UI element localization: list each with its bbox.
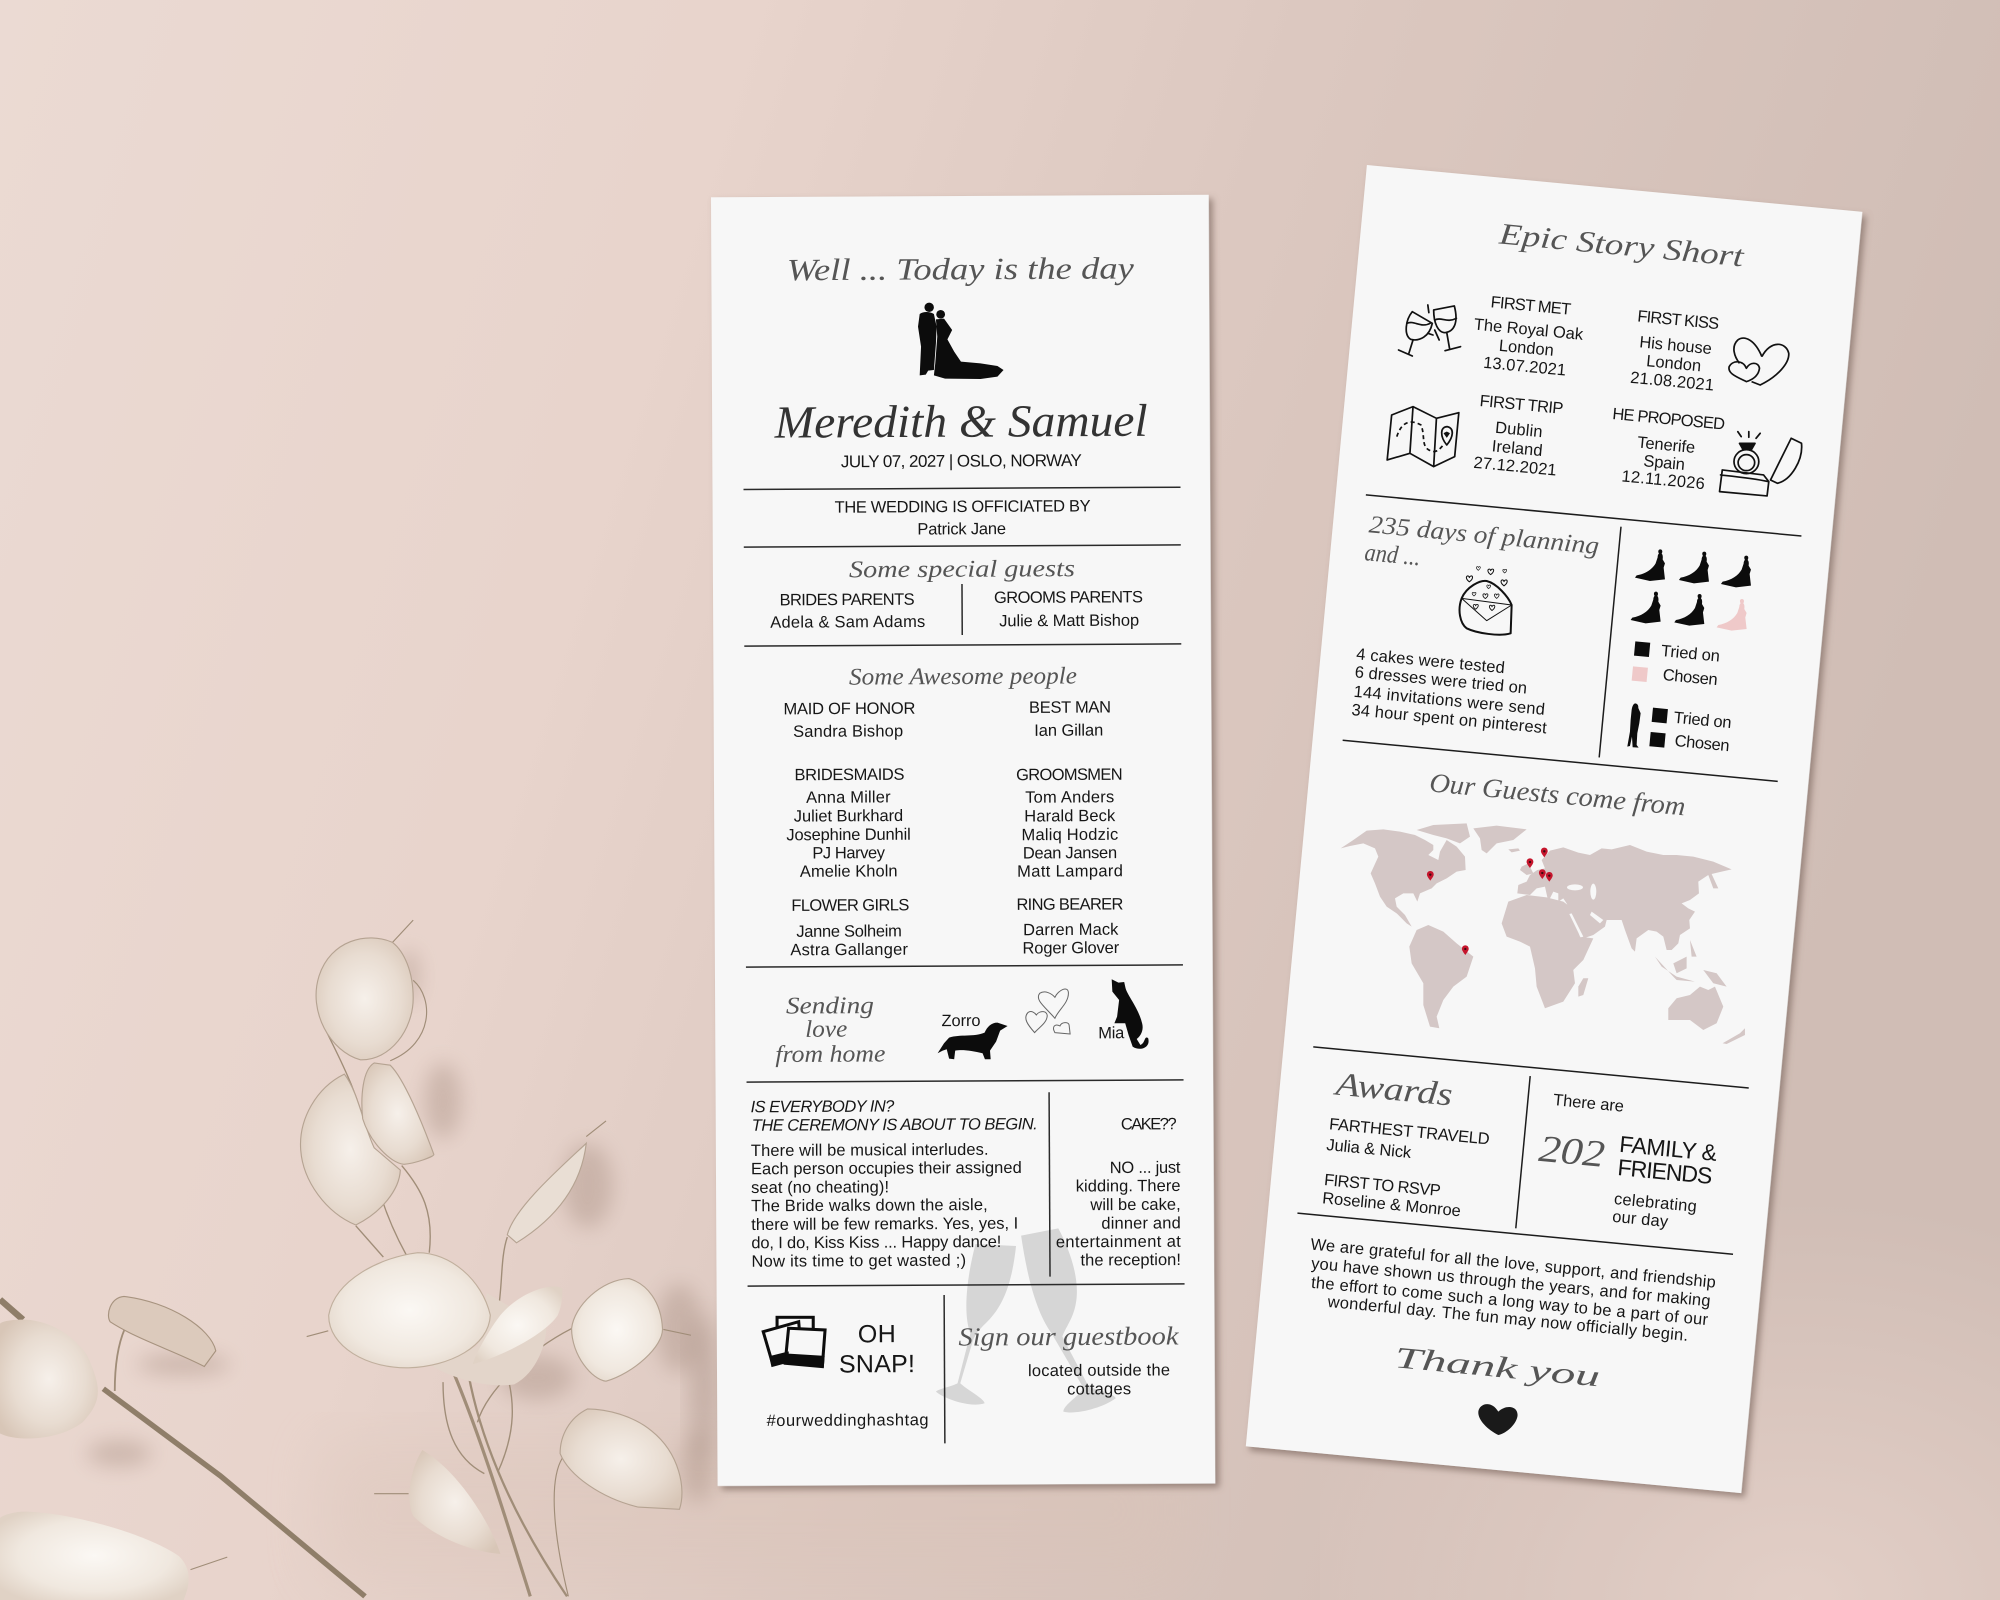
legend square: dress tried on [1634, 641, 1650, 657]
groomsmen: Harald Beck [1024, 807, 1116, 826]
leaf shadows [87, 949, 714, 1503]
heading: some special guests: Some special guests [849, 556, 1075, 583]
guestbook location [1028, 1361, 1170, 1399]
he proposed: Spain [1643, 452, 1686, 474]
cake note: kidding. There [1076, 1177, 1181, 1196]
suit legend labels: Chosen [1674, 732, 1730, 755]
icon: dress silhouettes tally [1627, 549, 1751, 748]
dress 1 tried on [1635, 549, 1665, 581]
cake note [1055, 1115, 1181, 1270]
guest count: celebrating [1613, 1190, 1698, 1216]
he proposed [1606, 405, 1726, 495]
sending love from home [775, 993, 886, 1068]
icon: three outline hearts [1026, 989, 1070, 1034]
inland seas [1567, 884, 1603, 937]
heading: epic story short: Epic Story Short [1497, 217, 1746, 274]
botanical branch with lunaria leaves [0, 920, 714, 1600]
planning stats: 144 invitations were send [1353, 683, 1546, 719]
he proposed: Tenerife [1637, 434, 1696, 457]
guest count: our day [1611, 1208, 1670, 1231]
first met: 13.07.2021 [1482, 354, 1567, 380]
bridesmaids: Josephine Dunhil [786, 826, 911, 844]
leaf: behind [448, 1300, 544, 1386]
ceremony notes [751, 1097, 1038, 1271]
icon: envelope with hearts [1460, 567, 1512, 635]
dress legend labels: Chosen [1662, 666, 1718, 689]
grooms parents: GROOMS PARENTS [994, 588, 1143, 607]
leaf: top [316, 938, 413, 1060]
icon: stacked photos [763, 1317, 825, 1367]
suit legend labels [1671, 709, 1733, 755]
heading: 235 days of planning [1363, 511, 1600, 588]
flower girls: Astra Gallanger [790, 941, 908, 959]
dress legend labels [1658, 642, 1721, 689]
ceremony notes: do, I do, Kiss Kiss ... Happy dance! [751, 1233, 1001, 1252]
brides parents: BRIDES PARENTS [780, 591, 915, 609]
bridesmaids: PJ Harvey [812, 844, 886, 862]
groomsmen: Maliq Hodzic [1021, 826, 1118, 844]
leaf: mid left [301, 1074, 400, 1225]
first trip: FIRST TRIP [1479, 392, 1564, 418]
first kiss: His house [1639, 333, 1713, 358]
thank-you paragraph: the effort to come such a long way to be a part of our [1310, 1274, 1709, 1329]
leaf: left slim [108, 1296, 216, 1366]
awards list: Julia & Nick [1326, 1136, 1413, 1162]
first kiss: London [1646, 352, 1702, 375]
icon: cat silhouette [1112, 979, 1149, 1049]
icon: groom silhouette [1627, 703, 1641, 748]
awards list: FIRST TO RSVP [1323, 1171, 1442, 1200]
first kiss [1630, 307, 1721, 395]
legend square: suit chosen [1649, 732, 1666, 748]
icon: ring in box [1720, 432, 1802, 496]
guest count: 202 [1537, 1128, 1607, 1176]
soft shadow by the card edge [692, 1315, 716, 1455]
panel: story card [1246, 165, 1862, 1493]
background wall [409, 0, 2000, 1600]
sending love from home: Sending [786, 993, 874, 1020]
heading: 235 days of planning: and ... [1363, 539, 1422, 571]
guestbook location: cottages [1067, 1380, 1131, 1398]
heading: awards: Awards [1332, 1066, 1454, 1113]
he proposed: HE PROPOSED [1612, 405, 1726, 434]
maid of honor: Sandra Bishop [793, 722, 903, 741]
brides parents [770, 591, 925, 632]
planning stats: 34 hour spent on pinterest [1351, 701, 1548, 737]
cake note: entertainment at [1056, 1233, 1181, 1251]
pin centres [1429, 850, 1550, 950]
guestbook heading: Sign our guestbook [958, 1321, 1179, 1352]
leaf: large pearl [329, 1253, 490, 1368]
maid of honor: MAID OF HONOR [783, 700, 916, 718]
icon: champagne glasses watermark [936, 1228, 1116, 1412]
heading: our guests come from: Our Guests come from [1428, 767, 1687, 821]
guest count: There are [1552, 1091, 1625, 1116]
dress 4 tried on [1631, 592, 1661, 623]
first trip [1473, 392, 1564, 480]
awards list [1321, 1115, 1490, 1222]
officiant: Patrick Jane [917, 520, 1006, 539]
continents [1341, 823, 1745, 1044]
legend square: dress chosen [1632, 666, 1648, 682]
groomsmen: GROOMSMEN [1016, 766, 1123, 784]
bridesmaids: Juliet Burkhard [794, 807, 903, 826]
maid of honor [783, 700, 916, 741]
best man: BEST MAN [1029, 698, 1111, 717]
bridesmaids: Anna Miller [806, 788, 891, 807]
thank-you paragraph: We are grateful for all the love, support, and friendship [1310, 1236, 1717, 1292]
dress 6 chosen [1717, 599, 1747, 631]
bridesmaids: Amelie Kholn [800, 862, 898, 881]
hashtag: #ourweddinghashtag [767, 1411, 929, 1430]
groomsmen: Matt Lampard [1017, 862, 1123, 881]
planning stats [1350, 645, 1553, 737]
divider lines [1297, 495, 1801, 1254]
awards list: FARTHEST TRAVELD [1328, 1115, 1490, 1148]
groomsmen: Dean Jansen [1023, 844, 1117, 863]
first kiss: 21.08.2021 [1630, 369, 1715, 395]
planning stats: 6 dresses were tried on [1354, 663, 1528, 698]
ceremony notes: seat (no cheating)! [751, 1178, 889, 1197]
ceremony notes: Each person occupies their assigned [751, 1159, 1022, 1178]
leaf: lower middle [409, 1450, 500, 1554]
date and place: JULY 07, 2027 | OSLO, NORWAY [841, 451, 1082, 471]
suit legend labels: Tried on [1673, 709, 1732, 732]
leaf: far left [0, 1320, 98, 1439]
ceremony notes: THE CEREMONY IS ABOUT TO BEGIN. [752, 1115, 1038, 1135]
dress 5 tried on [1674, 594, 1704, 626]
heading: some awesome people: Some Awesome people [849, 663, 1077, 691]
stems [0, 920, 691, 1596]
red location pins [1427, 848, 1553, 955]
dress 2 tried on [1679, 552, 1709, 583]
ring bearer [1016, 895, 1124, 958]
first met: The Royal Oak [1473, 316, 1585, 344]
planning stats: 4 cakes were tested [1356, 645, 1506, 677]
pet name: Mia: Mia [1098, 1024, 1125, 1042]
legend square: suit tried on [1652, 708, 1668, 723]
leaf: mid right [362, 1063, 434, 1164]
officiant [835, 497, 1091, 539]
pet name: Zorro: Zorro [941, 1012, 981, 1030]
panel: ceremony program card [711, 195, 1215, 1486]
dress 3 tried on [1721, 556, 1751, 587]
oh snap [839, 1320, 915, 1378]
officiant: THE WEDDING IS OFFICIATED BY [835, 497, 1091, 517]
first met: London [1498, 337, 1555, 360]
leaf: right round [572, 1279, 663, 1381]
icon: clinking wine glasses [1399, 305, 1461, 356]
thank-you paragraph: wonderful day. The fun may now officially begin. [1326, 1293, 1689, 1345]
first trip: Dublin [1494, 419, 1543, 441]
icon: couple silhouette [918, 303, 1004, 379]
thank-you paragraph [1304, 1236, 1717, 1347]
bridesmaids [786, 766, 911, 881]
icon: two outline hearts [1729, 338, 1789, 385]
ceremony card content [742, 250, 1185, 1444]
oh snap: OH [858, 1320, 896, 1348]
leaf: overlapping [480, 1288, 561, 1358]
groomsmen [1016, 766, 1123, 881]
heading: 235 days of planning: 235 days of planning [1368, 511, 1600, 560]
ceremony notes: Now its time to get wasted ;) [751, 1252, 966, 1271]
leaf: slim [507, 1143, 586, 1243]
leaf: bottom left [0, 1512, 189, 1600]
cake note: NO ... just [1110, 1159, 1181, 1177]
sending love from home: from home [775, 1041, 886, 1068]
heading: thank you: Thank you [1393, 1341, 1601, 1393]
guest count: FAMILY & [1618, 1131, 1718, 1166]
best man: Ian Gillan [1034, 722, 1103, 740]
grooms parents: Julie & Matt Bishop [999, 612, 1139, 630]
guest count [1532, 1090, 1721, 1235]
grooms parents [994, 588, 1143, 630]
groomsmen: Tom Anders [1025, 788, 1114, 807]
ceremony notes: there will be few remarks. Yes, yes, I [751, 1215, 1018, 1234]
icon: dachshund [938, 1023, 1008, 1059]
ceremony notes: There will be musical interludes. [751, 1141, 989, 1160]
divider lines [743, 487, 1185, 1444]
dress legend labels: Tried on [1660, 642, 1721, 666]
bridesmaids: BRIDESMAIDS [794, 766, 905, 784]
heading: well today is the day: Well ... Today is the day [787, 250, 1134, 287]
icon: solid black heart [1478, 1404, 1518, 1435]
ring bearer: Darren Mack [1023, 921, 1119, 939]
oh snap: SNAP! [839, 1350, 915, 1378]
cake note: dinner and [1101, 1214, 1181, 1233]
first trip: Ireland [1491, 437, 1543, 460]
best man [1029, 698, 1111, 740]
ring bearer: RING BEARER [1016, 895, 1124, 914]
sending love from home: love [805, 1017, 848, 1043]
heading: couple names: Meredith & Samuel [773, 395, 1148, 448]
first kiss: FIRST KISS [1637, 307, 1720, 333]
awards list: Roseline & Monroe [1322, 1189, 1462, 1220]
guest count: FRIENDS [1617, 1154, 1714, 1189]
thank-you paragraph: you have shown us through the years, and for making [1310, 1255, 1711, 1310]
cake note: CAKE?? [1121, 1115, 1177, 1134]
ceremony notes: The Bride walks down the aisle, [751, 1196, 988, 1215]
leaf: lower right [560, 1409, 682, 1509]
world map with guest pins [1341, 823, 1745, 1044]
flower girls: FLOWER GIRLS [791, 896, 909, 915]
first met: FIRST MET [1490, 293, 1572, 319]
cake note: will be cake, [1089, 1196, 1181, 1214]
first trip: 27.12.2021 [1473, 454, 1557, 480]
he proposed: 12.11.2026 [1621, 467, 1706, 493]
ring bearer: Roger Glover [1022, 939, 1120, 958]
brides parents: Adela & Sam Adams [770, 613, 925, 632]
flower girls: Janne Solheim [796, 922, 902, 941]
cake note: the reception! [1080, 1251, 1181, 1270]
icon: folded map with pin [1387, 407, 1459, 467]
guestbook location: located outside the [1028, 1361, 1170, 1380]
ceremony notes: IS EVERYBODY IN? [751, 1098, 895, 1116]
flower girls [790, 896, 910, 959]
first met [1470, 292, 1587, 381]
